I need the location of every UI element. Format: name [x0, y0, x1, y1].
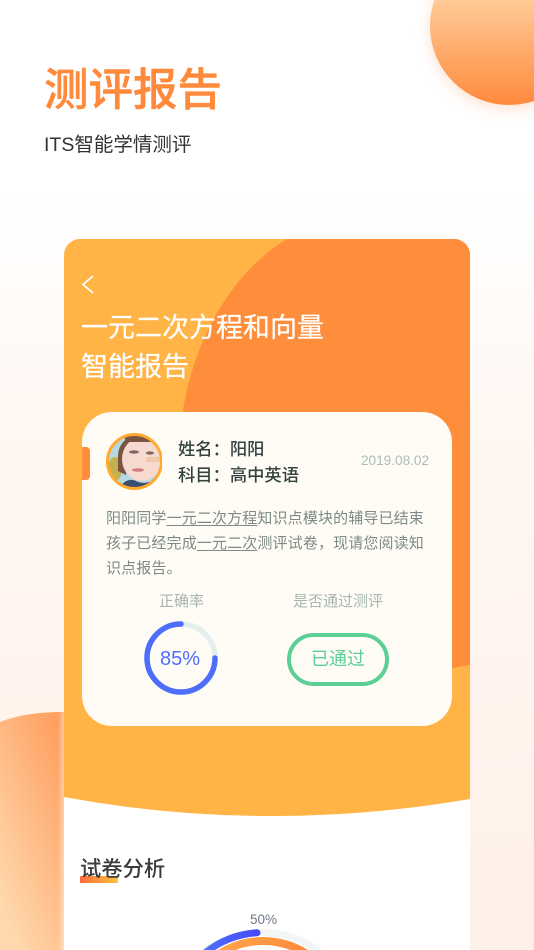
decorative circle: top right: [430, 0, 534, 105]
student name and subject: 姓名：阳阳: [178, 439, 264, 459]
orange side tab: [82, 447, 90, 480]
report date: 2019.08.02: [361, 453, 429, 468]
chart: accuracy ring 85%: 85%: [160, 648, 200, 670]
decorative shape: bottom left: [0, 712, 64, 950]
heading: 测评报告: 测评报告: [44, 66, 222, 115]
student name and subject: 科目：高中英语: [178, 465, 299, 485]
card title: 智能报告: [81, 352, 189, 382]
icon: back arrow: [82, 275, 94, 294]
report description: 识点报告。: [106, 560, 182, 577]
label: accuracy: 正确率: [159, 593, 204, 610]
report description: 阳阳同学一元二次方程知识点模块的辅导已结束: [106, 510, 424, 527]
card title: 一元二次方程和向量: [81, 313, 324, 343]
badge: passed: [287, 633, 389, 686]
badge: passed: 已通过: [311, 649, 365, 669]
heading underline: [80, 876, 118, 883]
report description: 孩子已经完成一元二次测评试卷，现请您阅读知: [106, 535, 424, 552]
panel: report card: [64, 239, 470, 950]
card title: [81, 313, 324, 382]
avatar: [106, 433, 162, 490]
panel: student summary: [82, 412, 452, 726]
card header background: [64, 239, 470, 816]
student name and subject: [178, 439, 299, 485]
section heading: 试卷分析: 试卷分析: [80, 857, 165, 881]
report description: [106, 510, 424, 577]
subtitle: ITS智能学情测评: [44, 134, 191, 156]
label: pass status: 是否通过测评: [293, 593, 383, 610]
chart: accuracy ring 85%: [144, 621, 218, 695]
chart label: 50%: 50%: [250, 912, 277, 927]
chart: analysis rings: [203, 929, 322, 950]
